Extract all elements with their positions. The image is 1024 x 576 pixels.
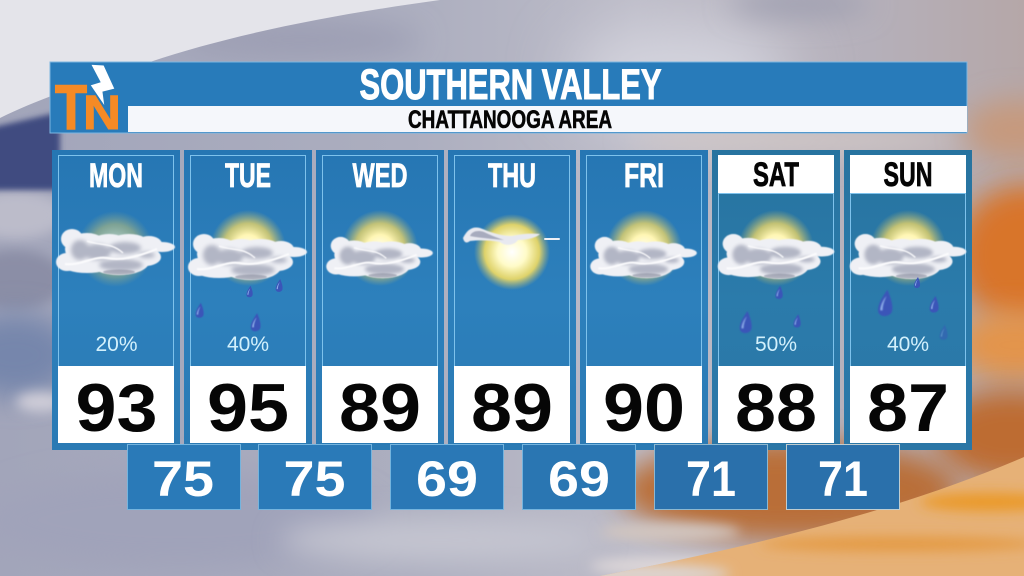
panel: Tuesday bbox=[184, 150, 312, 450]
high temperature bbox=[322, 366, 438, 446]
day label: THU bbox=[488, 157, 536, 195]
panel: Wednesday bbox=[316, 150, 444, 450]
panel: Sunday bbox=[844, 150, 972, 450]
subtitle strip bbox=[128, 106, 967, 132]
icon: sun, cloud and rain bbox=[188, 210, 307, 331]
low temperature: Thu night: 69 bbox=[548, 451, 610, 507]
high temperature: 87 bbox=[867, 370, 949, 446]
rain chance: 40% bbox=[227, 333, 269, 356]
icon: sun, cloud and rain bbox=[718, 210, 834, 333]
low temperature: Mon night bbox=[128, 444, 240, 510]
logo: TN lightning: T bbox=[55, 73, 87, 143]
high temperature: 89 bbox=[339, 370, 421, 446]
panel: Thursday bbox=[448, 150, 576, 450]
title: SOUTHERN VALLEY bbox=[360, 61, 662, 109]
panel: Saturday bbox=[712, 150, 840, 450]
low temperature: Sat night: 71 bbox=[818, 451, 868, 507]
day label: SAT bbox=[753, 156, 799, 194]
low temperature: Mon night: 75 bbox=[152, 451, 214, 507]
icon: partly cloudy bbox=[590, 210, 697, 286]
high temperature: 90 bbox=[603, 370, 685, 446]
high temperature: 88 bbox=[735, 370, 817, 446]
low temperature: Tue night: 75 bbox=[284, 451, 346, 507]
day label: TUE bbox=[225, 157, 271, 195]
day label: WED bbox=[352, 157, 408, 195]
high temperature: 93 bbox=[76, 370, 158, 446]
low temperature: Tue night bbox=[258, 444, 372, 510]
low temperature: Fri night bbox=[654, 444, 768, 510]
low temperature: Wed night bbox=[390, 444, 504, 510]
low temperature: Sat night bbox=[786, 444, 900, 510]
high temperature: 95 bbox=[207, 370, 289, 446]
rain chance: 50% bbox=[755, 333, 797, 356]
logo: TN lightning bbox=[55, 64, 121, 143]
navy storm band bbox=[0, 112, 60, 190]
rain chance: 20% bbox=[95, 333, 138, 356]
header banner bbox=[50, 61, 967, 143]
swoosh: lower-right amber sky bbox=[600, 457, 1024, 576]
day label bbox=[718, 155, 834, 194]
icon: partly cloudy bbox=[56, 211, 175, 287]
high temperature bbox=[586, 366, 702, 446]
icon: sun, cloud and rain bbox=[850, 210, 966, 340]
high temperature bbox=[454, 366, 570, 446]
swoosh: upper-left pale sky bbox=[0, 0, 440, 118]
logo: TN lightning: N bbox=[83, 87, 121, 140]
high temperature bbox=[850, 366, 966, 446]
high temperature bbox=[190, 366, 306, 446]
panel: Monday bbox=[52, 150, 180, 450]
icon: mostly sunny bbox=[463, 214, 559, 290]
low temperature: Wed night: 69 bbox=[416, 451, 478, 507]
icon: partly cloudy bbox=[326, 210, 433, 286]
low temperature: Fri night: 71 bbox=[686, 451, 736, 507]
low temperature: Thu night bbox=[522, 444, 636, 510]
high temperature bbox=[718, 366, 834, 446]
day label bbox=[850, 155, 966, 194]
subtitle: CHATTANOOGA AREA bbox=[408, 106, 612, 134]
rain chance: 40% bbox=[887, 333, 929, 356]
day label: FRI bbox=[624, 157, 664, 195]
day label: MON bbox=[89, 157, 143, 195]
panel: Friday bbox=[580, 150, 708, 450]
day label: SUN bbox=[884, 156, 932, 194]
high temperature: 89 bbox=[471, 370, 553, 446]
high temperature bbox=[58, 366, 174, 446]
